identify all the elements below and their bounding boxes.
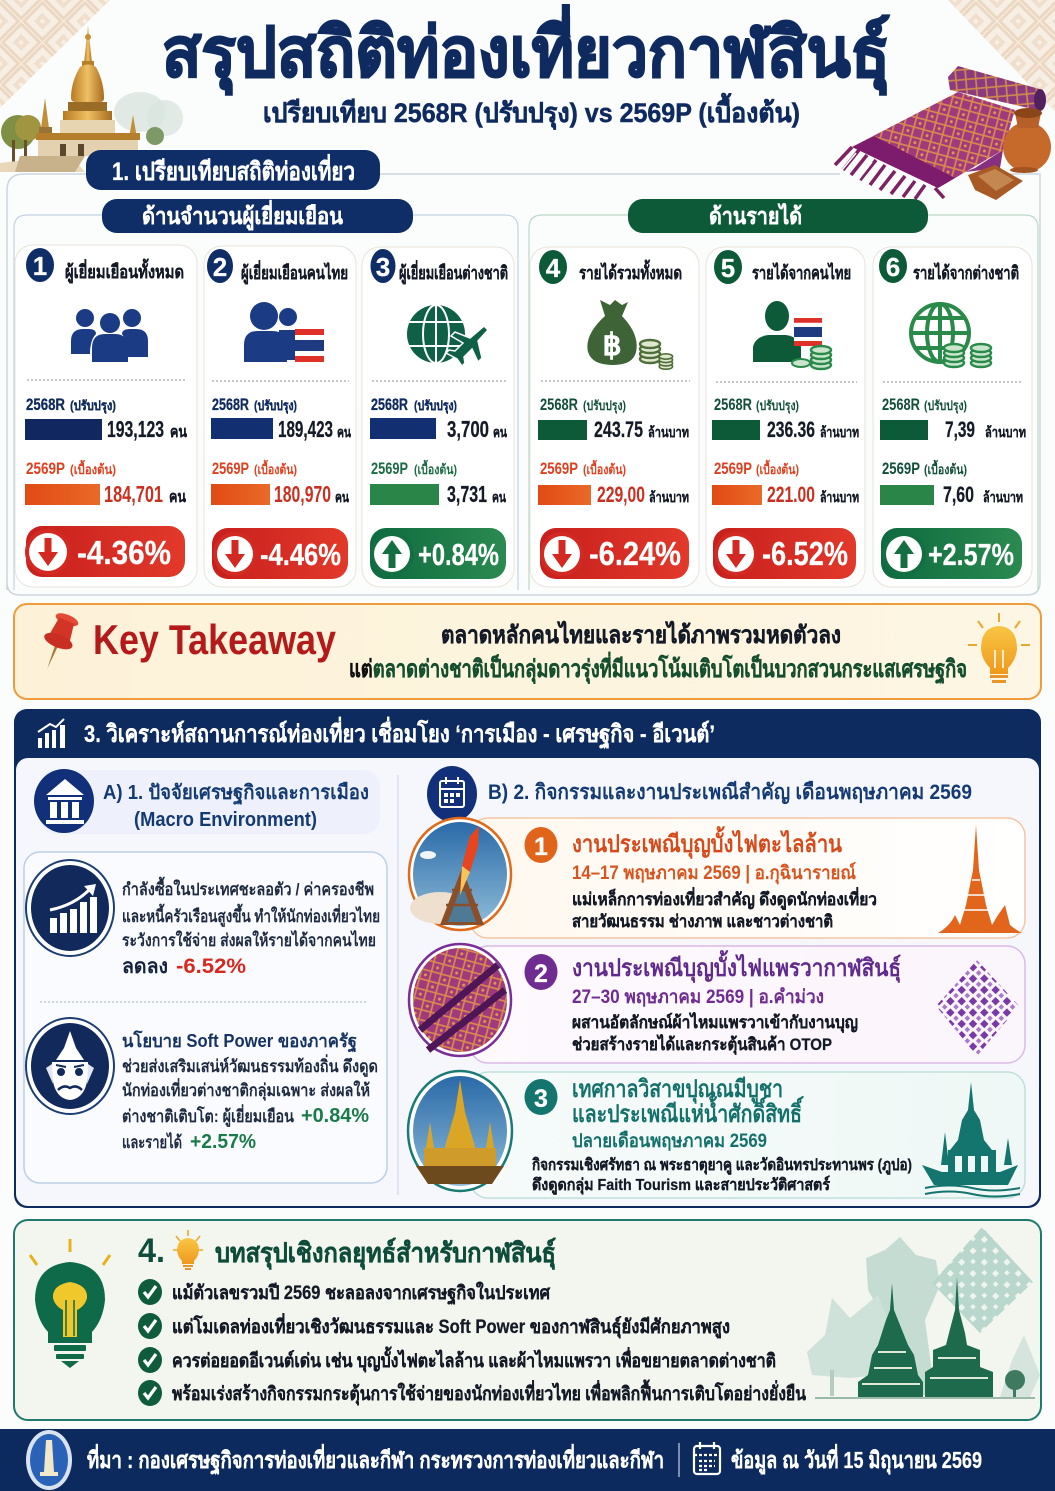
text: soft power: ช่วยส่งเสริมเสน่ห์วัฒนธรรมท้องถิ่น ดึงดูด <box>122 1054 378 1078</box>
event description <box>572 887 877 931</box>
heading: revenue pill: ด้านรายได้ <box>709 202 802 229</box>
panel: visitors sub-panel outline <box>14 215 518 590</box>
icon: Phaya Thaen mask medallion <box>26 1018 114 1114</box>
2569P row <box>25 459 186 507</box>
2569P row: ล้านบาท <box>983 489 1023 505</box>
icon: light bulb <box>968 613 1030 683</box>
2569P row: 229,00 <box>597 482 645 507</box>
event title: และประเพณีแห่น้ำศักดิ์สิทธิ์ <box>572 1095 804 1128</box>
2568R row: 2568R <box>714 395 752 414</box>
2569P row: 2569P <box>371 459 408 478</box>
badge <box>524 954 558 990</box>
2568R row: 2568R <box>882 395 920 414</box>
decorative corner: left textile pattern <box>0 0 110 108</box>
subsection A heading <box>34 769 380 834</box>
event date: 27–30 พฤษภาคม 2569 | อ.คำม่วง <box>572 987 824 1008</box>
badge 3 <box>370 249 396 283</box>
2568R row: คน <box>170 424 187 441</box>
icon: textile diamond <box>936 960 1019 1056</box>
icon: big bulb <box>30 1239 110 1368</box>
icon: small bulb <box>173 1230 203 1270</box>
panel: key takeaway <box>14 604 1041 699</box>
card title: รายได้รวมทั้งหมด <box>579 259 682 283</box>
2569P row: 2569P <box>714 459 752 478</box>
text: economy: กำลังซื้อในประเทศชะลอตัว / ค่าครองชีพ <box>122 876 374 899</box>
card 6: foreign revenue <box>873 247 1032 587</box>
text: soft power: นักท่องเที่ยวต่างชาติกลุ่มเฉพาะ ส่งผลให้ <box>122 1078 370 1101</box>
card title: ผู้เยี่ยมเยือนต่างชาติ <box>399 260 508 285</box>
change pill: -6.24% <box>589 535 681 572</box>
text: economy: ระวังการใช้จ่าย ส่งผลให้รายได้จากคนไทย <box>122 930 376 950</box>
card 4: total revenue <box>530 247 699 587</box>
icon: calendar <box>694 1442 720 1474</box>
icon: person, flag and coins <box>753 301 831 369</box>
card title: ผู้เยี่ยมเยือนคนไทย <box>241 260 348 285</box>
change pill: -6.52% <box>762 535 848 572</box>
illustration: temples and textile watermark <box>807 1227 1040 1398</box>
subsection B heading <box>427 766 972 822</box>
2569P row: 2569P <box>26 459 65 478</box>
2568R row <box>880 395 1026 442</box>
2569P row: (เบื้องต้น) <box>70 459 116 477</box>
illustration: golden stupa temple <box>0 25 183 172</box>
text: economy: -6.52% <box>176 955 246 978</box>
heading: key takeaway: Key Takeaway <box>93 616 337 663</box>
event title: งานประเพณีบุญบั้งไฟตะไลล้าน <box>572 825 842 860</box>
icon: three people <box>71 309 148 362</box>
heading: strategic summary: บทสรุปเชิงกลยุทธ์สำหรับกาฬสินธุ์ <box>215 1237 556 1270</box>
illustration: silk scarf, clay pot and bowl <box>835 66 1051 200</box>
heading: strategic summary: 4. <box>138 1232 165 1270</box>
event description: กิจกรรมเชิงศรัทธา ณ พระธาตุยาคู และวัดอินทรประทานพร (ภูปอ) <box>532 1156 912 1176</box>
2569P row <box>538 459 689 507</box>
2568R row: 7,39 <box>945 417 975 442</box>
2568R row: 2568R <box>371 395 408 414</box>
2568R row: 3,700 <box>447 416 489 442</box>
2568R row: 189,423 <box>278 416 333 442</box>
text: soft power: นโยบาย Soft Power ของภาครัฐ <box>122 1030 357 1053</box>
panel: section 4 strategic summary <box>14 1220 1041 1420</box>
2568R row: (ปรับปรุง) <box>414 398 457 414</box>
decorative corner: right textile pattern <box>948 0 1055 112</box>
2568R row <box>370 395 507 442</box>
2569P row: ล้านบาท <box>649 489 689 505</box>
badge 6 <box>879 249 907 283</box>
badge 6: 6 <box>886 252 900 282</box>
2568R row <box>712 395 859 442</box>
2569P row: คน <box>492 489 506 505</box>
icon: push pin <box>33 609 83 675</box>
card 5: Thai revenue <box>706 247 865 587</box>
change pill: +0.84% <box>418 537 499 572</box>
heading: section 1 pill: 1. เปรียบเทียบสถิติท่องเที่ยว <box>112 154 355 186</box>
badge <box>524 1079 558 1115</box>
2569P row: 180,970 <box>274 481 331 507</box>
2568R row: ล้านบาท <box>985 424 1026 440</box>
event title: งานประเพณีบุญบั้งไฟแพรวากาฬสินธุ์ <box>572 949 901 984</box>
icon: people with Thai flag <box>244 302 324 362</box>
2569P row <box>211 459 349 507</box>
2568R row <box>25 395 187 442</box>
event title <box>572 1076 804 1128</box>
icon: money bag and coins <box>587 300 673 369</box>
2569P row: 7,60 <box>943 482 974 507</box>
heading: visitors pill: ด้านจำนวนผู้เยี่ยมเยือน <box>142 199 343 231</box>
badge 2: 2 <box>213 252 227 282</box>
card 2: Thai visitors <box>204 246 356 587</box>
2569P row: 2569P <box>882 459 920 478</box>
text: soft power: +2.57% <box>190 1131 256 1153</box>
2568R row: 2568R <box>26 395 65 414</box>
badge 4 <box>539 250 567 284</box>
panel: macro factors <box>24 852 387 1183</box>
subsection A heading: (Macro Environment) <box>134 809 317 831</box>
2568R row: ล้านบาท <box>648 424 689 440</box>
event title: เทศกาลวิสาขปุณณมีบูชา <box>572 1076 783 1105</box>
2569P row: คน <box>335 489 349 505</box>
2568R row: (ปรับปรุง) <box>924 398 967 414</box>
2569P row: (เบื้องต้น) <box>254 459 297 477</box>
badge 2 <box>207 249 233 283</box>
bullet 2 <box>138 1313 730 1339</box>
icon: ministry seal <box>26 1430 72 1490</box>
bullet 3 <box>138 1346 776 1373</box>
2569P row <box>880 459 1023 507</box>
date text: ข้อมูล ณ วันที่ 15 มิถุนายน 2569 <box>731 1443 982 1475</box>
2568R row: 193,123 <box>107 416 164 442</box>
2568R row <box>538 395 689 442</box>
card title: ผู้เยี่ยมเยือนทั้งหมด <box>65 258 184 284</box>
badge 1 <box>26 248 54 282</box>
badge 4: 4 <box>546 253 561 283</box>
change pill: -4.46% <box>260 537 341 572</box>
event description: ช่วยสร้างรายได้และกระตุ้นสินค้า OTOP <box>572 1034 832 1055</box>
2569P row: (เบื้องต้น) <box>924 459 967 477</box>
title: สรุปสถิติท่องเที่ยวกาฬสินธุ์ <box>162 4 890 95</box>
photo: rocket <box>409 818 511 930</box>
subtitle: เปรียบเทียบ 2568R (ปรับปรุง) vs 2569P (เบื้องต้น) <box>263 92 800 130</box>
badge: 3 <box>534 1085 548 1113</box>
heading: section 1 pill <box>86 150 380 190</box>
badge: 2 <box>534 960 548 988</box>
source text: ที่มา : กองเศรษฐกิจการท่องเที่ยวและกีฬา กระทรวงการท่องเที่ยวและกีฬา <box>87 1443 664 1475</box>
2569P row: 2569P <box>540 459 578 478</box>
text: economy: และหนี้ครัวเรือนสูงขึ้น ทำให้นักท่องเที่ยวไทย <box>122 903 380 928</box>
2569P row <box>712 459 859 507</box>
2569P row: (เบื้องต้น) <box>583 459 626 477</box>
change pill <box>881 528 1022 579</box>
2568R row: (ปรับปรุง) <box>254 398 297 414</box>
2568R row: 236.36 <box>767 417 815 442</box>
change pill: +2.57% <box>928 537 1014 572</box>
footer <box>0 1429 1055 1491</box>
bullet 2: แต่โมเดลท่องเที่ยวเชิงวัฒนธรรมและ Soft Power ของกาฬสินธุ์ยังมีศักยภาพสูง <box>172 1313 730 1339</box>
card title: รายได้จากคนไทย <box>752 262 851 283</box>
text: economy: ลดลง <box>122 956 168 978</box>
heading: revenue pill <box>628 199 928 233</box>
badge 5: 5 <box>721 253 735 283</box>
photo: golden stupa <box>408 1071 512 1191</box>
2568R row: 243.75 <box>594 417 643 442</box>
card 1: total visitors <box>15 245 197 587</box>
event description: ผสานอัตลักษณ์ผ้าไหมแพรวาเข้ากับงานบุญ <box>572 1012 858 1033</box>
text: soft power: ต่างชาติเติบโต: ผู้เยี่ยมเยือน <box>122 1104 294 1128</box>
event 3: Visakha Puja festival <box>408 1071 1025 1198</box>
heading: section 3: 3. วิเคราะห์สถานการณ์ท่องเที่ยว เชื่อมโยง ‘การเมือง - เศรษฐกิจ - อีเวนต์’ <box>84 716 715 750</box>
change pill <box>212 528 348 579</box>
2568R row: (ปรับปรุง) <box>583 398 626 414</box>
2569P row: (เบื้องต้น) <box>756 459 799 477</box>
2568R row: คน <box>337 424 351 440</box>
2569P row: คน <box>169 489 186 506</box>
2569P row: 2569P <box>212 459 249 478</box>
change pill <box>713 528 856 579</box>
text: economy <box>122 876 380 978</box>
event 2: Bun Bang Fai Praewa <box>409 944 1025 1063</box>
change pill <box>25 526 185 577</box>
2569P row: 184,701 <box>104 481 163 507</box>
bullet 4 <box>138 1379 806 1406</box>
change pill: -4.36% <box>77 534 171 571</box>
2569P row: ล้านบาท <box>820 489 859 505</box>
icon: globe and plane <box>407 305 488 366</box>
event date: ปลายเดือนพฤษภาคม 2569 <box>572 1130 767 1152</box>
panel: section 1 comparison <box>7 174 1040 595</box>
icon: growth chart medallion <box>26 860 114 956</box>
change pill <box>370 528 506 579</box>
icon: temple on water <box>922 1082 1020 1196</box>
2568R row: (ปรับปรุง) <box>756 398 799 414</box>
2568R row <box>211 395 351 442</box>
event description <box>532 1156 912 1196</box>
icon: rocket tower <box>938 825 1022 933</box>
subsection B heading: B) 2. กิจกรรมและงานประเพณีสำคัญ เดือนพฤษภาคม 2569 <box>488 780 972 805</box>
event description: แม่เหล็กการท่องเที่ยวสำคัญ ดึงดูดนักท่องเที่ยว <box>572 887 877 911</box>
heading: strategic summary <box>138 1230 556 1270</box>
badge 3: 3 <box>376 252 390 282</box>
bullet 1 <box>138 1279 551 1306</box>
panel: revenue sub-panel outline <box>529 215 1038 590</box>
text: soft power: และรายได้ <box>122 1132 182 1152</box>
event date: 14–17 พฤษภาคม 2569 | อ.กุฉินารายณ์ <box>572 862 856 885</box>
badge <box>524 827 558 863</box>
bullet 3: ควรต่อยอดอีเวนต์เด่น เช่น บุญบั้งไฟตะไลล้าน และผ้าไหมแพรวา เพื่อขยายตลาดต่างชาติ <box>172 1346 776 1373</box>
2569P row <box>370 459 506 507</box>
subsection A heading: A) 1. ปัจจัยเศรษฐกิจและการเมือง <box>103 781 369 806</box>
2568R row: (ปรับปรุง) <box>70 398 116 414</box>
bullet 1: แม้ตัวเลขรวมปี 2569 ชะลอลงจากเศรษฐกิจในประเทศ <box>172 1281 551 1306</box>
heading: section 3 <box>38 716 715 750</box>
panel: section 3 analysis <box>14 709 1041 1208</box>
badge: 1 <box>534 833 548 861</box>
2569P row: 221.00 <box>767 482 815 507</box>
icon: money bag and coins: ฿ <box>602 329 622 362</box>
2569P row: 3,731 <box>447 481 487 507</box>
event description <box>572 1012 858 1055</box>
2568R row: 2568R <box>540 395 578 414</box>
2568R row: 2568R <box>212 395 249 414</box>
badge 5 <box>714 250 742 284</box>
event description: ดึงดูดกลุ่ม Faith Tourism และสายประวัติศาสตร์ <box>532 1175 830 1196</box>
photo: praewa silk <box>409 944 511 1056</box>
heading: visitors pill <box>102 199 413 233</box>
bullet 4: พร้อมเร่งสร้างกิจกรรมกระตุ้นการใช้จ่ายของนักท่องเที่ยวไทย เพื่อพลิกฟื้นการเติบโตอย่างยั่งยืน <box>172 1379 806 1406</box>
event 1: Bun Bang Fai Talai Lan <box>409 818 1025 938</box>
event description: สายวัฒนธรรม ช่างภาพ และชาวต่างชาติ <box>572 912 833 931</box>
2568R row: คน <box>493 424 507 440</box>
change pill <box>540 528 689 579</box>
card 3: foreign visitors <box>362 247 514 587</box>
2568R row: ล้านบาท <box>820 424 859 440</box>
text: soft power <box>122 1030 378 1153</box>
line 1: ตลาดหลักคนไทยและรายได้ภาพรวมหดตัวลง <box>441 620 841 649</box>
2569P row: (เบื้องต้น) <box>414 459 457 477</box>
icon: rising bar chart <box>38 719 65 748</box>
icon: globe and coins <box>911 304 991 367</box>
text: soft power: +0.84% <box>301 1105 369 1127</box>
badge 1: 1 <box>33 251 47 281</box>
